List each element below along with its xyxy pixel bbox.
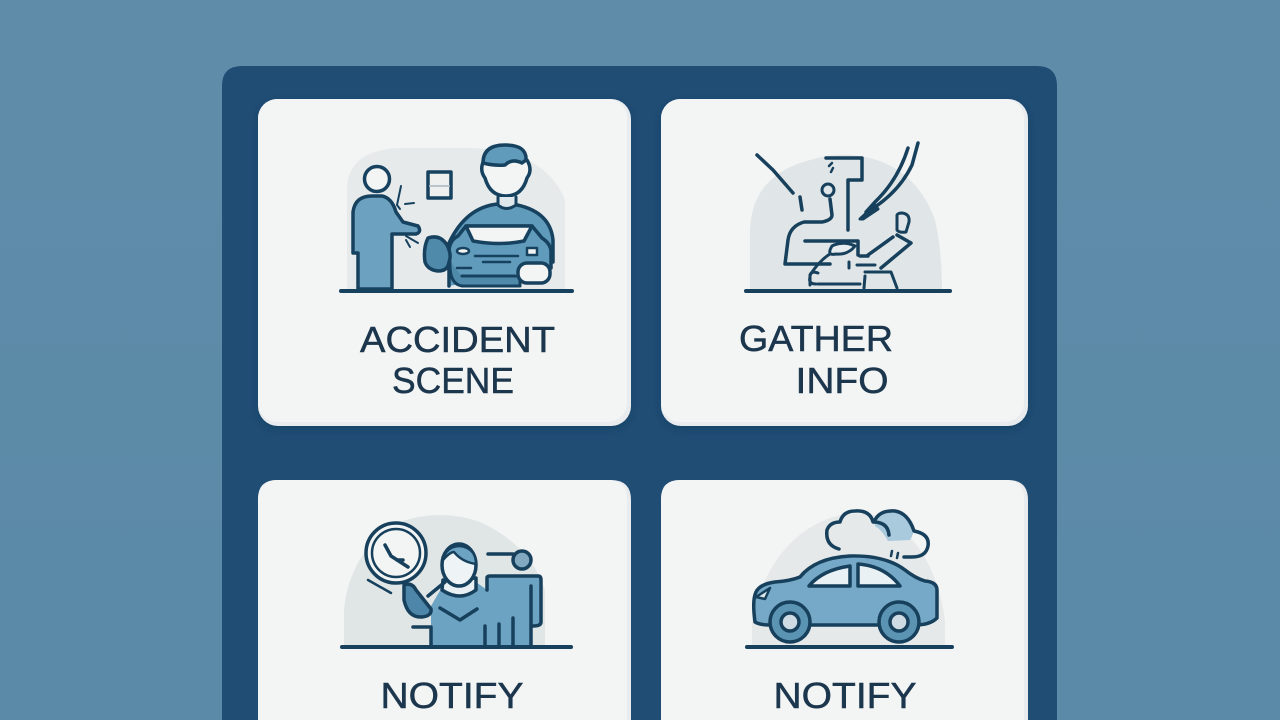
label: GATHER [739,318,893,359]
icon: car with cloud [747,511,952,647]
icon: person with clock [342,515,571,647]
card: notify (person with clock) [258,480,631,720]
ground line [342,645,571,649]
card: accident scene: SCENE [392,360,514,401]
card: gather info [661,99,1028,426]
label: NOTIFY [380,675,524,716]
card: gather info: INFO [796,360,888,401]
ground line [746,289,950,293]
label: ACCIDENT [360,319,555,360]
card: notify (car and cloud) [661,480,1028,720]
card: accident scene [258,99,631,426]
label: NOTIFY [774,675,916,716]
icon: person and damaged car [341,145,572,291]
dark backing panel [222,66,1057,720]
ground line [747,645,952,649]
ground line [341,289,572,293]
icon: scene sketch with seated figure [746,143,950,291]
